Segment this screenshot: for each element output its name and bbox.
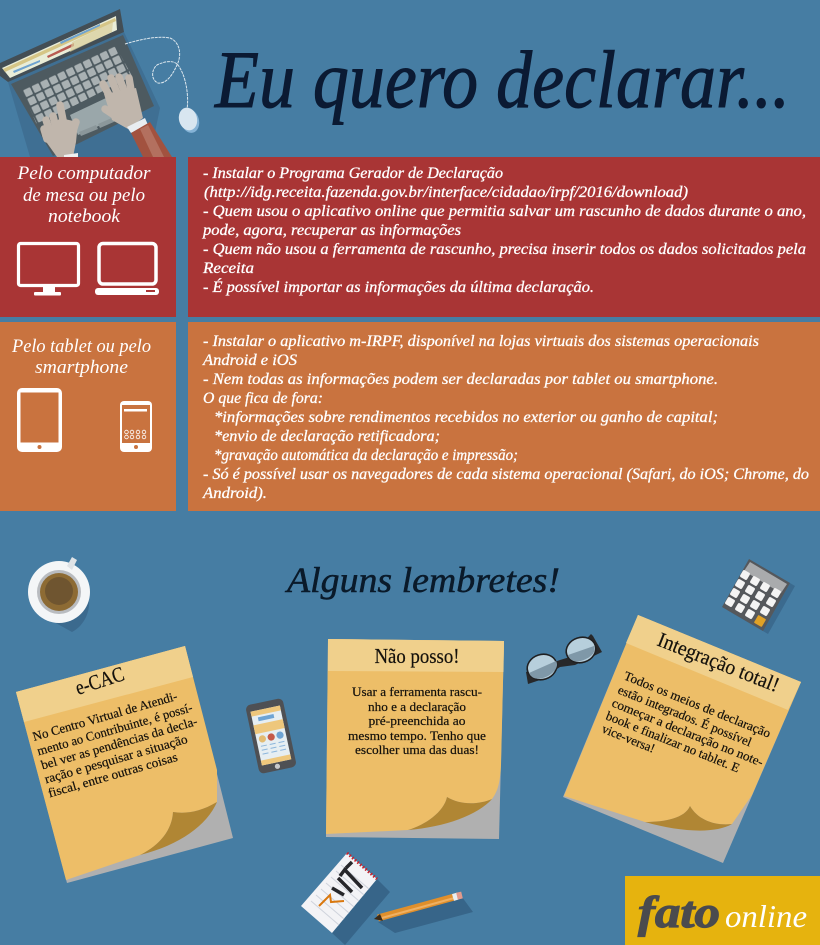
note text: Não posso: pré-preenchida ao	[368, 714, 466, 728]
panel: note e-CAC	[16, 646, 233, 883]
heading: computer: Pelo computador	[16, 163, 151, 184]
note title: Integração total: Integração total!	[654, 627, 783, 697]
note text: e-CAC: fiscal, entre outras coisas	[46, 750, 179, 800]
panel: tablet instructions: *gravação automática da declaração e impressão;	[214, 447, 518, 464]
note text: e-CAC: mento ao Contribuinte, é possí-	[35, 701, 194, 758]
panel: computer heading: notebook	[48, 206, 121, 227]
panel: note Não posso	[326, 639, 504, 839]
icon: desktop monitor	[18, 244, 78, 296]
panel: tablet instructions: Android).	[202, 485, 267, 502]
panel: computer heading: de mesa ou pelo	[23, 185, 145, 206]
icon: phone	[245, 698, 297, 774]
panel: computer instructions: pode, agora, recuperar as informações	[202, 222, 461, 239]
note text: e-CAC	[31, 689, 199, 800]
panel: tablet instructions: *envio de declaração retificadora;	[214, 428, 440, 445]
illustration: laptop with hands and mouse	[0, 9, 202, 157]
heading: reminders: Alguns lembretes!	[285, 560, 560, 600]
panel: note Integração total	[563, 615, 801, 863]
icon: laptop	[95, 244, 159, 295]
note text: e-CAC: ração e pesquisar a situação	[43, 732, 189, 786]
note text: e-CAC: No Centro Virtual de Atendi-	[31, 689, 179, 744]
note title: Não posso: Não posso!	[374, 644, 460, 668]
note text: Integração total: estão integrados. É possível	[616, 683, 754, 750]
panel: tablet instructions	[188, 322, 820, 511]
note title: e-CAC: e-CAC	[72, 661, 127, 700]
note text: Não posso: mesmo tempo. Tenho que	[348, 729, 486, 743]
panel: computer instructions: (http://idg.receita.fazenda.gov.br/interface/cidadao/irpf/2016/download)	[204, 184, 688, 201]
panel: computer instructions	[188, 157, 820, 317]
panel: computer instructions: - Instalar o Programa Gerador de Declaração	[203, 165, 503, 182]
logo: fato online: online	[725, 898, 807, 934]
icon: coffee cup	[28, 557, 90, 632]
note text: Não posso: Usar a ferramenta rascu-	[352, 685, 482, 699]
panel: tablet instructions: - Nem todas as informações podem ser declaradas por tablet ou smartphone.	[203, 371, 718, 388]
panel: computer instructions: - É possível importar as informações da última declaração.	[203, 277, 594, 296]
icon: glasses	[524, 633, 602, 684]
panel: computer instructions: - Quem não usou a ferramenta de rascunho, precisa inserir todos os dados solicitados pela	[203, 241, 806, 258]
panel: tablet instructions: Android e iOS	[202, 352, 297, 369]
note text: Não posso: nho e a declaração	[368, 700, 466, 714]
heading: tablet: Pelo tablet ou pelo	[11, 336, 151, 357]
panel: tablet instructions: *informações sobre rendimentos recebidos no exterior ou ganho de capital;	[214, 409, 718, 426]
note text: Integração total	[600, 669, 773, 775]
note text: Não posso	[348, 685, 486, 757]
panel: computer instructions: Receita	[202, 260, 254, 277]
icon: pencil	[374, 895, 473, 933]
panel: tablet heading: smartphone	[35, 357, 128, 378]
icon: calculator	[722, 559, 795, 634]
note text: Integração total: book e finalizar no tablet. E	[604, 709, 742, 775]
note text: Integração total: Todos os meios de declaração	[622, 669, 773, 741]
note text: Integração total: vice-versa!	[600, 722, 657, 756]
panel: tablet instructions: - Instalar o aplicativo m-IRPF, disponível na lojas virtuais dos sistemas operacionais	[203, 333, 759, 350]
note text: e-CAC: bel ver as pendências da decla-	[39, 714, 199, 772]
note text: Integração total: começar a declaração no note-	[610, 696, 765, 769]
panel: computer heading	[0, 157, 176, 317]
panel: tablet heading	[0, 322, 176, 511]
panel: computer instructions: - Quem usou o aplicativo online que permitia salvar um rascunho de dados durante o ano,	[203, 203, 806, 220]
logo: fato online	[625, 876, 820, 945]
icon: notepad	[301, 853, 390, 945]
icon: smartphone	[120, 401, 152, 452]
panel: tablet instructions: O que fica de fora:	[203, 390, 323, 407]
note text: Não posso: escolher uma das duas!	[355, 743, 479, 757]
logo: fato online: fato	[638, 888, 720, 937]
icon: tablet	[17, 388, 62, 452]
panel: tablet instructions: - Só é possível usar os navegadores de cada sistema operacional (Safari, do iOS; Chrome, do	[203, 466, 809, 483]
